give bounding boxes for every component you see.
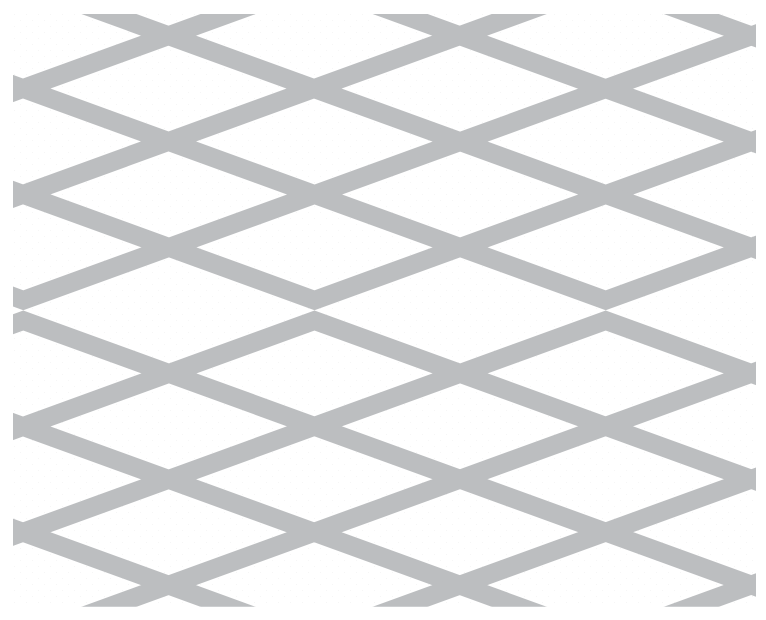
lower lattice half [8,320,762,617]
upper lattice half [8,4,762,300]
